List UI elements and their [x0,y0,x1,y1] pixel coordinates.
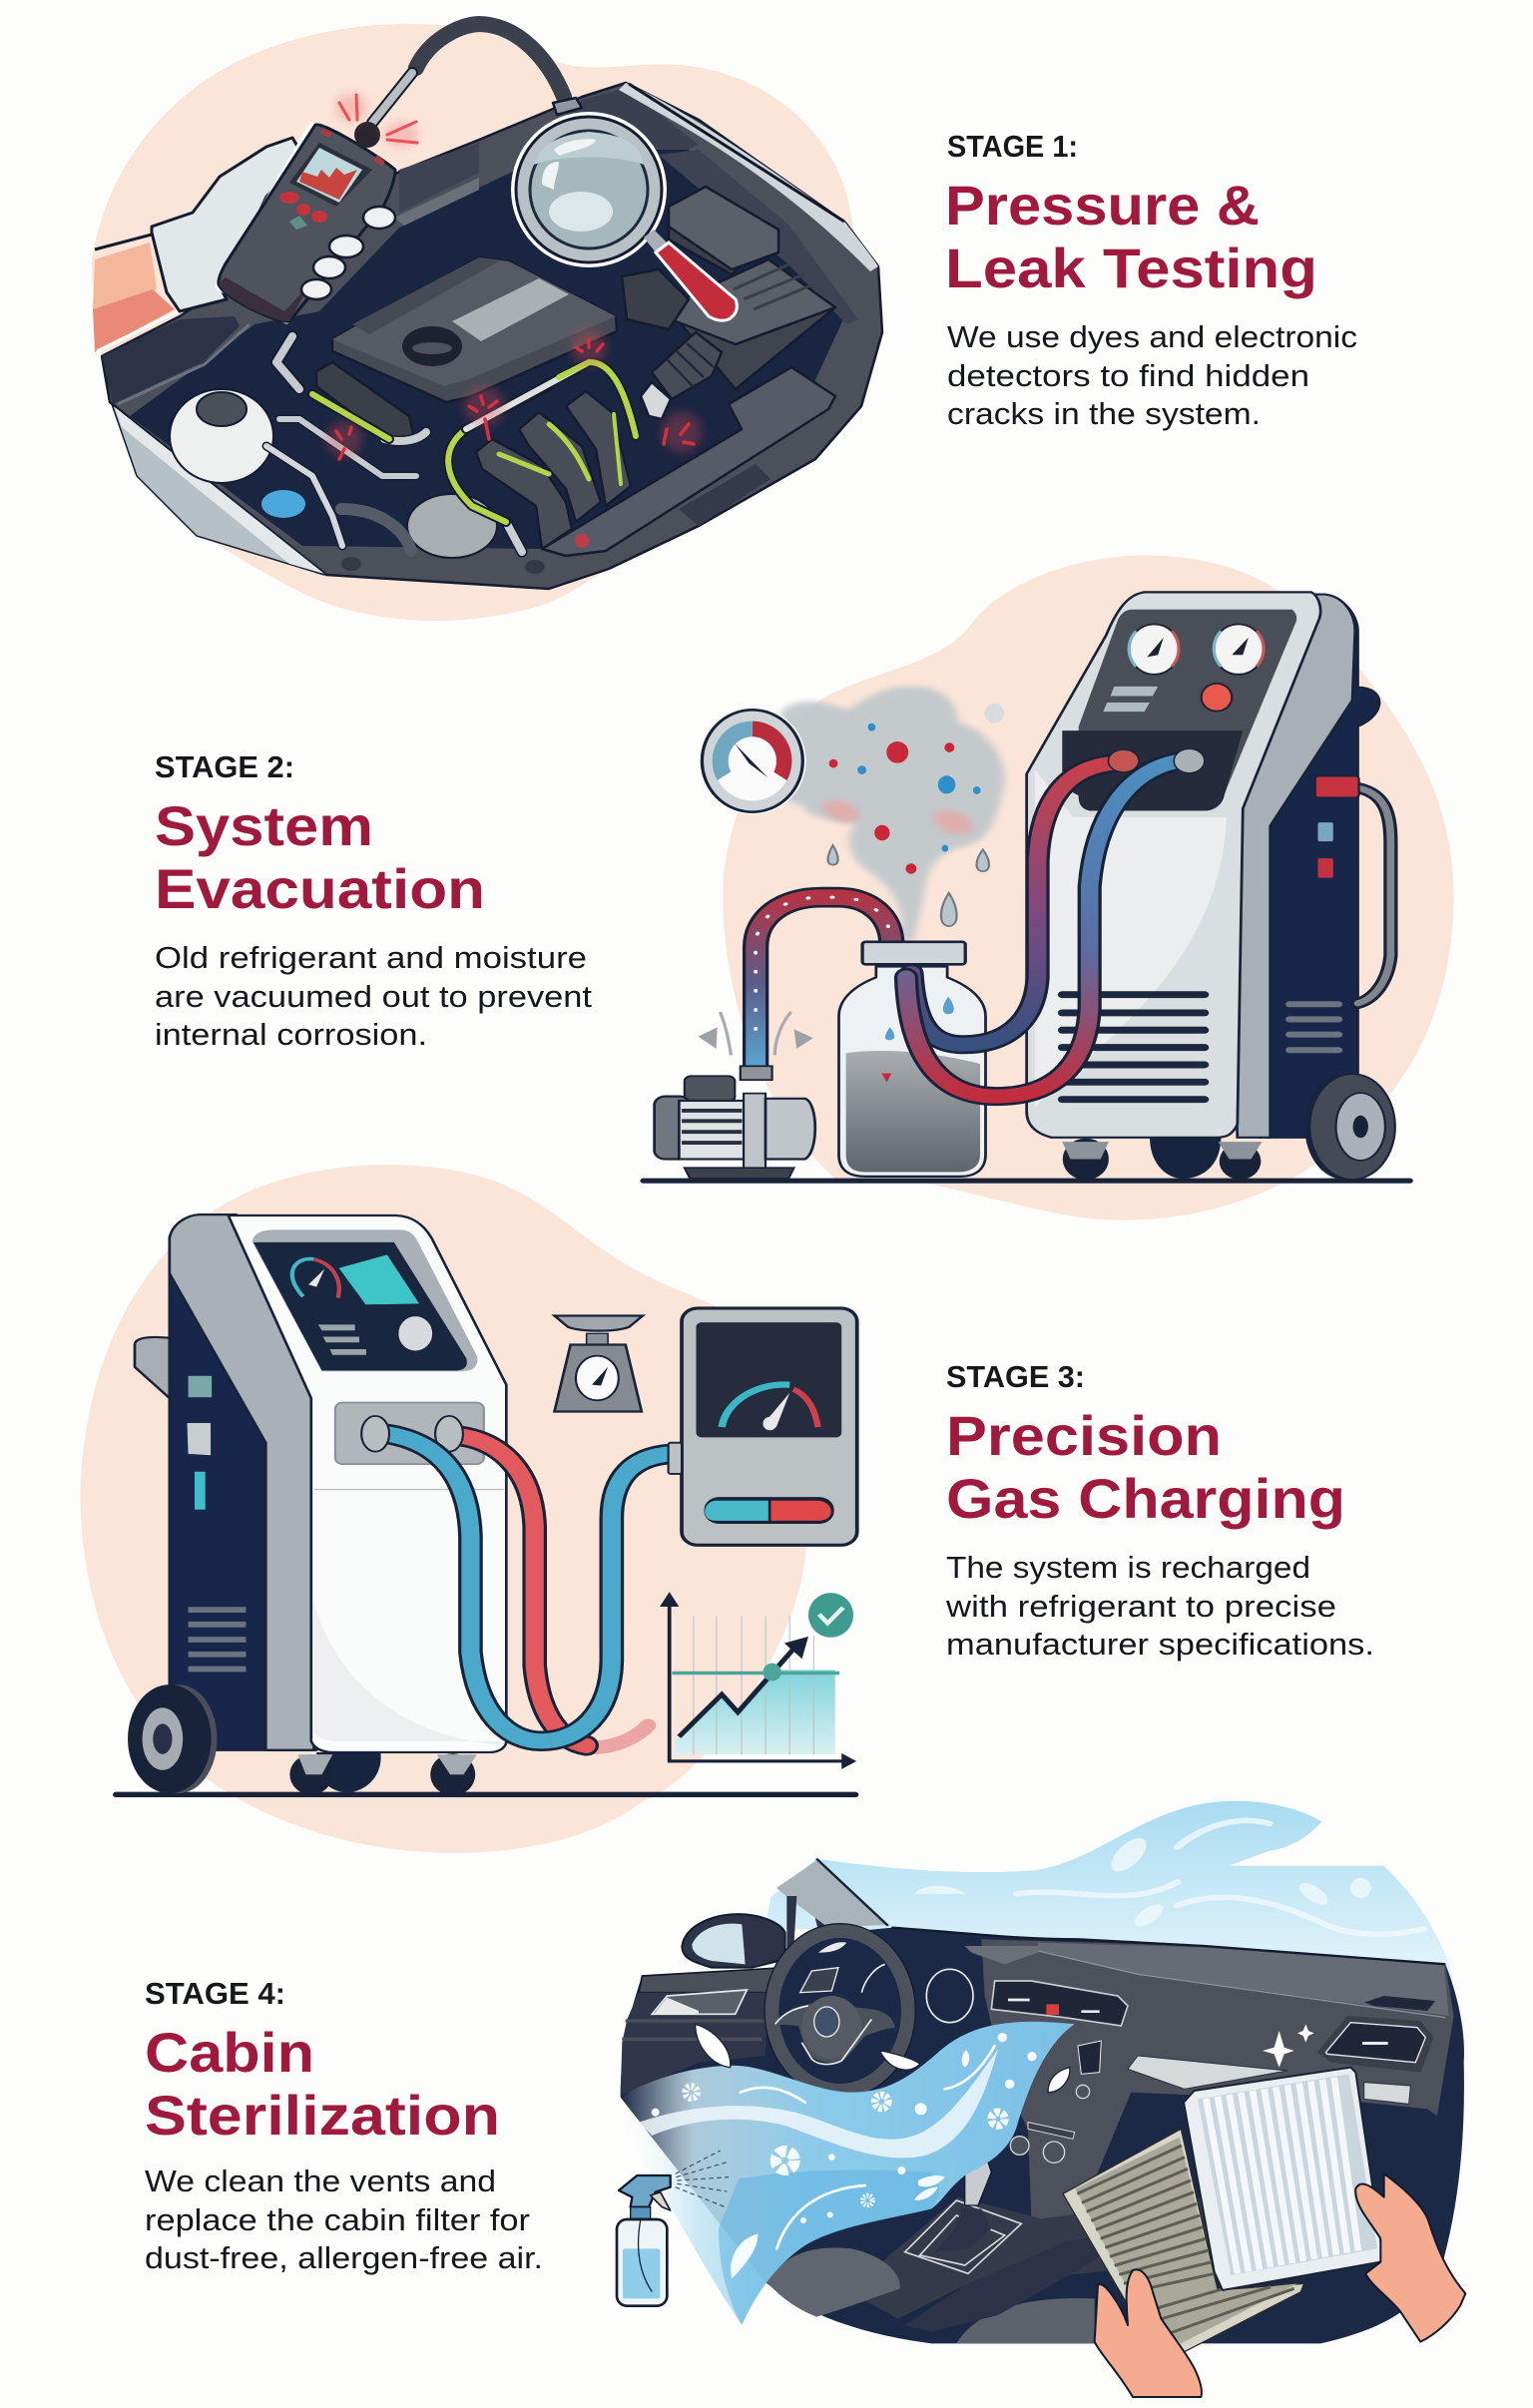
scale [555,1315,643,1411]
coolant reservoir [170,389,305,518]
text: stage 3: Precision [946,1404,1222,1467]
panel: stage 1 illustration [92,24,882,621]
spray bottle [617,2151,729,2306]
ground line [644,1175,1410,1187]
blue hose [361,1416,672,1741]
right side of cabin [1063,1996,1465,2397]
text: stage 4: We clean the vents and [145,2164,496,2198]
vacuum hose [756,897,891,1068]
wing mirror [682,1914,785,1968]
vacuum pump [655,1012,815,1179]
gloved hand [152,138,299,311]
sparkles [1263,2024,1314,2068]
text: stage 1: Pressure & [945,174,1260,237]
machine hoses [906,748,1205,1097]
text: stage 3: Gas Charging [946,1467,1345,1530]
gooseneck cable [372,24,564,123]
vapor cloud [773,687,1005,940]
text: stage 3 [945,1359,1374,1662]
console and armrest [766,2188,1265,2343]
service machine [1027,592,1379,1138]
text: stage 4: Sterilization [145,2084,500,2147]
charging machine [135,1214,506,1752]
center stack [1010,2041,1101,2163]
red hose [435,1416,587,1745]
casters and wheel [128,1685,477,1795]
passenger vent [1317,1996,1435,2073]
text: stage 1: STAGE 1: [947,129,1078,164]
digital charge display [669,1308,857,1545]
interior scene [617,1896,1465,2397]
bay edge highlight [97,311,178,351]
text: stage 1: detectors to find hidden [947,358,1309,393]
text: stage 1 [945,129,1357,431]
red detector glow [335,94,419,147]
center vent [991,1981,1128,2026]
glove fingers [301,207,395,299]
text: stage 2: System [155,794,373,857]
cool air stream [621,2022,1075,2325]
panel: stage 3 illustration [80,1165,857,1853]
gear shifter [905,2161,1021,2273]
text: stage 1: Leak Testing [945,237,1317,299]
text: stage 2: are vacuumed out to prevent [155,979,592,1014]
text: stage 4: Cabin [145,2021,314,2084]
sky window [765,1801,1453,1984]
red leak bursts [326,329,702,459]
text: stage 2: Evacuation [155,857,485,920]
white leaves [696,2024,1070,2093]
pressure gauge [699,708,806,814]
text: stage 4: replace the cabin filter for [145,2202,530,2237]
text: stage 4 [145,1976,543,2275]
collection tank [838,942,985,1177]
text: stage 4: STAGE 4: [145,1976,285,2011]
left hand [1095,2269,1202,2397]
peach blob [80,1165,806,1853]
air box [669,187,835,389]
text: stage 3: The system is recharged [946,1550,1310,1585]
leak detector [219,122,395,321]
right hand [1355,2173,1465,2342]
front tray [341,367,835,574]
text: stage 3: with refrigerant to precise [945,1589,1336,1624]
ground line [116,1788,855,1800]
compliance chart [660,1589,857,1769]
door panel [621,1968,785,2096]
engine bay shell [102,83,882,589]
text: stage 1: We use dyes and electronic [947,319,1357,354]
text: stage 2: STAGE 2: [155,749,294,784]
faded red tail [573,1725,648,1747]
clean cabin filter [1184,2068,1382,2290]
text: stage 2: internal corrosion. [155,1017,427,1052]
belt [341,509,411,551]
text: stage 2 [155,749,592,1052]
manifold runners [476,391,631,549]
forearm [93,235,175,352]
text: stage 4: dust-free, allergen-free air. [145,2240,543,2275]
text: stage 1: cracks in the system. [947,396,1261,431]
dashboard [891,1928,1454,2228]
panel: stage 4 illustration [617,1801,1465,2397]
text: stage 2: Old refrigerant and moisture [155,940,587,975]
silver hoses [266,336,522,552]
text: stage 3: manufacturer specifications. [946,1627,1374,1662]
pulley [407,494,497,558]
panel: stage 2 illustration [644,556,1453,1220]
engine cover [332,257,617,402]
interior base [621,1928,1464,2343]
green leak dye lines [312,362,636,522]
side handle [1315,776,1390,1003]
peach blob [723,556,1453,1220]
lower engine block [316,362,414,439]
text: stage 3: STAGE 3: [946,1359,1085,1394]
instrument cluster [861,1964,973,2023]
magnifying glass [511,98,737,320]
peach blob [92,24,858,621]
ribbed intake hoses [622,269,722,419]
glovebox trim [1128,2056,1410,2104]
dirty cabin filter [1063,2129,1304,2352]
steering wheel [765,1924,915,2098]
casters and wheel [1062,1074,1395,1180]
window frame [786,1896,828,1954]
